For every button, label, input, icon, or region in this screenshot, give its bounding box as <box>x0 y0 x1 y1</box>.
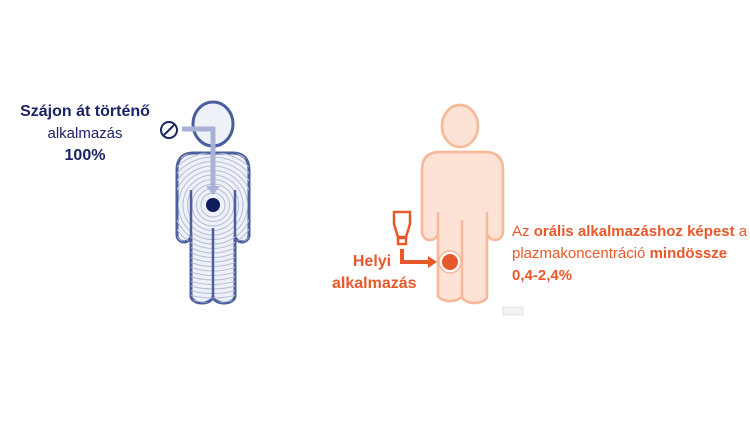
small badge <box>503 307 523 315</box>
tube icon <box>394 212 410 244</box>
text: result: 0,4-2,4% <box>512 267 572 284</box>
text: result: plazmakoncentráció mindössze <box>512 245 727 262</box>
blue arrow <box>182 129 213 188</box>
pill icon <box>161 122 177 138</box>
text: oral <box>20 103 150 164</box>
blue figure <box>160 100 250 304</box>
orange dot <box>439 251 461 273</box>
text: oral: Szájon át történő <box>20 103 150 120</box>
text: local: Helyi <box>353 253 391 270</box>
text: oral: alkalmazás <box>47 125 123 142</box>
target dot <box>206 198 220 212</box>
orange figure <box>394 105 503 303</box>
text: result <box>512 223 748 284</box>
text: result: Az orális alkalmazáshoz képest a <box>512 223 747 240</box>
text: local <box>332 253 417 292</box>
text: oral: 100% <box>65 147 105 164</box>
orange arrow <box>402 249 430 262</box>
figure graphics <box>160 100 524 316</box>
text: local: alkalmazás <box>332 275 417 292</box>
